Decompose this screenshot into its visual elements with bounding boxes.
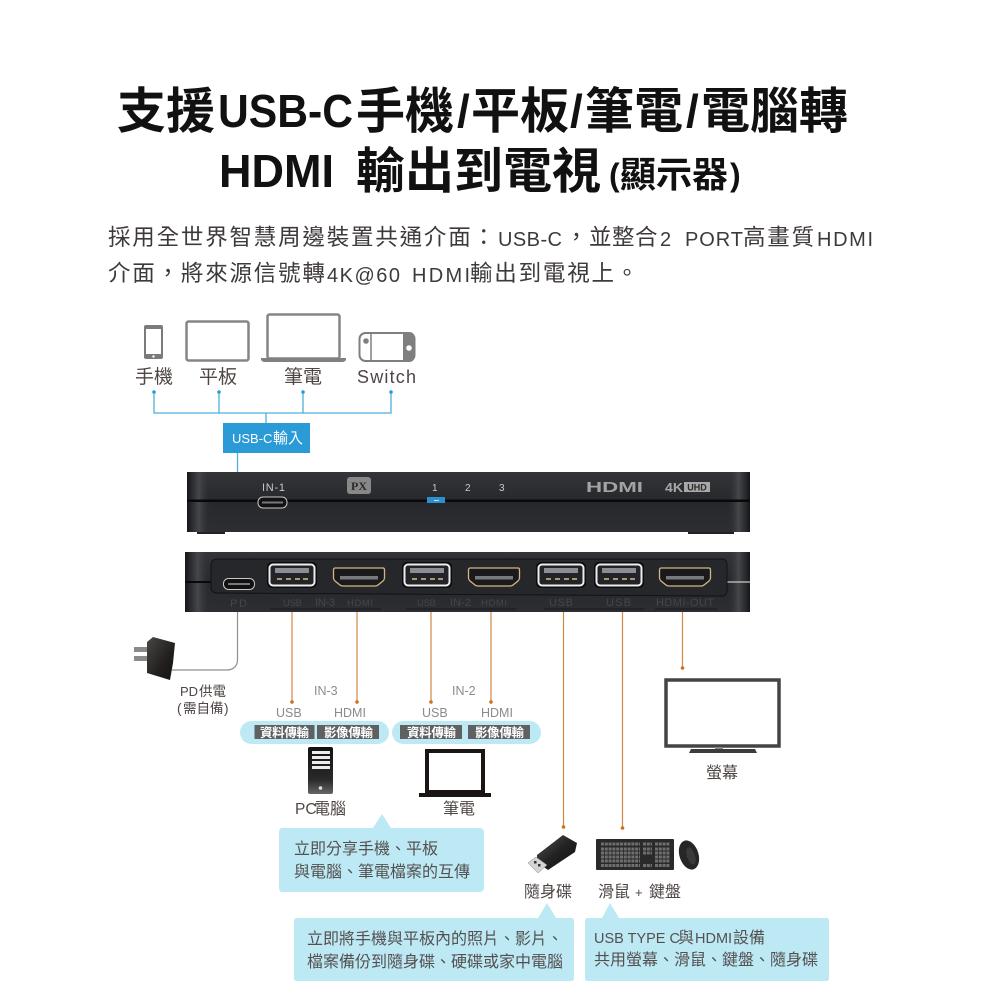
IN-3 and IN-2 labels: HDMI — [481, 706, 513, 720]
connector tree — [152, 390, 393, 501]
intro text: 輸出到電視上。 — [470, 261, 640, 286]
intro text: 介面，將來源信號轉 — [108, 261, 327, 286]
title: 顯示器 — [620, 154, 728, 195]
pill: IN-3 transfers — [240, 721, 389, 744]
embossed port labels: USB — [417, 598, 436, 609]
icon: laptop 2 — [419, 749, 491, 797]
intro text: 並整合 — [589, 225, 658, 250]
USB-C input label: USB-C — [232, 431, 272, 446]
flash drive label: 隨身碟 — [524, 883, 572, 901]
indicators: 1 — [432, 483, 438, 494]
PX logo — [347, 477, 371, 494]
device labels: Switch — [357, 367, 416, 387]
port: USB-C — [258, 497, 287, 508]
callout: backup: 立即將手機與平板內的照片、影片、 — [307, 930, 563, 948]
embossed port labels: HDMI-OUT — [656, 597, 714, 609]
keyboard mouse label — [598, 883, 681, 901]
USB-C input label — [223, 423, 310, 453]
IN-3 and IN-2 labels: HDMI — [334, 706, 366, 720]
icon: keyboard — [596, 839, 674, 870]
pill: IN-2 transfers — [392, 721, 541, 744]
embossed port labels: USB — [606, 597, 631, 609]
title: ( — [609, 157, 620, 193]
hub top view — [187, 472, 750, 534]
title: HDMI — [219, 145, 334, 197]
icon: USB flash drive — [528, 835, 577, 873]
HDMI logo: HDMI — [586, 479, 643, 496]
indicators — [427, 483, 505, 503]
intro text: USB-C — [498, 229, 562, 251]
callout: device sharing: 與 — [678, 929, 694, 947]
monitor label: 螢幕 — [706, 764, 738, 782]
title: / — [686, 85, 699, 137]
PC label: 電腦 — [314, 800, 346, 818]
USB port 2 — [594, 562, 644, 588]
IN-3 and IN-2 labels: USB — [276, 706, 302, 720]
intro text: 採用全世界智慧周邊裝置共通介面： — [108, 225, 497, 250]
callout: backup: 檔案備份到隨身碟、硬碟或家中電腦 — [307, 953, 563, 971]
intro text: HDMI — [817, 229, 873, 251]
title — [117, 85, 848, 199]
orange connector lines — [290, 612, 684, 830]
icon: tablet — [186, 322, 248, 360]
title: 筆電 — [585, 85, 683, 139]
title: / — [457, 85, 470, 137]
icon: monitor — [666, 680, 779, 753]
PD label: PD — [180, 684, 198, 699]
PD label: ) — [224, 701, 228, 716]
intro text: 4K@60 — [327, 265, 400, 287]
4K UHD logo: 4K — [665, 481, 683, 495]
keyboard mouse label: + — [635, 885, 643, 900]
hub rear view — [185, 552, 750, 612]
icon: phone — [144, 325, 163, 359]
pill: IN-3 transfers: 影像傳輸 — [324, 725, 373, 740]
4K UHD logo: UHD — [687, 482, 707, 492]
embossed port labels: USB — [283, 598, 302, 609]
embossed port labels — [230, 597, 714, 610]
PX logo: PX — [351, 479, 367, 493]
embossed port labels: HDMI — [481, 598, 507, 609]
PD power line — [172, 612, 238, 670]
pill: IN-2 transfers: 資料傳輸 — [407, 725, 456, 740]
device labels — [135, 366, 416, 388]
pill: IN-2 transfers: 影像傳輸 — [475, 725, 524, 740]
icon: power plug — [134, 637, 175, 680]
USB-C input label: 輸入 — [273, 430, 303, 447]
intro text: PORT — [685, 229, 743, 251]
IN-3 and IN-2 labels — [276, 684, 513, 720]
IN-3 and IN-2 labels: IN-2 — [452, 684, 476, 698]
device labels: 筆電 — [284, 366, 322, 388]
callout: file sharing: 立即分享手機、平板 — [294, 840, 438, 858]
icon: laptop — [261, 314, 346, 362]
intro text: ， — [565, 225, 589, 250]
device labels: 手機 — [135, 366, 173, 388]
title: 平板 — [471, 85, 569, 139]
HDMI out port — [660, 568, 710, 586]
port: PD USB-C — [224, 578, 254, 590]
indicators: 2 — [465, 483, 471, 494]
PD label: ( — [177, 701, 182, 716]
PC label: PC — [295, 801, 317, 818]
callout: device sharing: HDMI — [695, 931, 732, 947]
embossed port labels: IN-3 — [315, 597, 335, 609]
keyboard mouse label: 鍵盤 — [649, 883, 681, 901]
4K UHD logo — [665, 481, 710, 495]
embossed port labels: HDMI — [347, 598, 373, 609]
IN-3 HDMI port — [334, 568, 384, 586]
IN-3 and IN-2 labels: IN-3 — [314, 684, 338, 698]
icon: PC tower — [308, 747, 333, 794]
callout: file sharing — [279, 814, 484, 892]
title: USB-C — [218, 85, 353, 137]
PD label: 供電 — [199, 684, 226, 699]
device labels: 平板 — [199, 366, 237, 388]
IN-2 HDMI port — [468, 568, 520, 586]
IN-2 USB port — [402, 562, 452, 588]
callout: device sharing: USB TYPE C — [594, 931, 680, 947]
keyboard mouse label: 滑鼠 — [598, 883, 630, 901]
USB port 1 — [536, 562, 586, 588]
intro text: HDMI — [412, 265, 470, 287]
PD label: 需自備 — [183, 701, 224, 716]
embossed port labels: USB — [549, 597, 573, 609]
icon: mouse — [675, 838, 703, 872]
callout: file sharing: 與電腦、筆電檔案的互傳 — [294, 863, 470, 881]
embossed port labels: IN-2 — [450, 597, 471, 609]
title: 手機 — [356, 85, 454, 139]
pill: IN-3 transfers: 資料傳輸 — [260, 725, 309, 740]
title: 電腦轉 — [701, 85, 848, 139]
title: 支援 — [117, 85, 215, 139]
intro text: 2 — [660, 229, 671, 251]
IN-3 and IN-2 labels: USB — [422, 706, 448, 720]
title: 輸出到電視 — [356, 145, 601, 199]
callout: device sharing — [585, 903, 829, 981]
intro text: 高畫質 — [743, 225, 816, 250]
laptop label: 筆電 — [443, 800, 475, 818]
icon: Switch — [360, 332, 415, 362]
PD label — [177, 684, 228, 716]
callout: device sharing: 共用螢幕、滑鼠、鍵盤、隨身碟 — [594, 951, 818, 969]
PC label — [295, 800, 346, 818]
IN-3 USB port — [267, 562, 317, 588]
callout: device sharing: 設備 — [733, 929, 765, 947]
title: ) — [730, 157, 741, 193]
callout: backup — [294, 903, 574, 981]
intro text — [108, 225, 873, 287]
embossed port labels: PD — [230, 598, 247, 610]
title: / — [570, 85, 583, 137]
indicators: 3 — [499, 483, 505, 494]
hub top view: IN-1 — [262, 482, 285, 494]
